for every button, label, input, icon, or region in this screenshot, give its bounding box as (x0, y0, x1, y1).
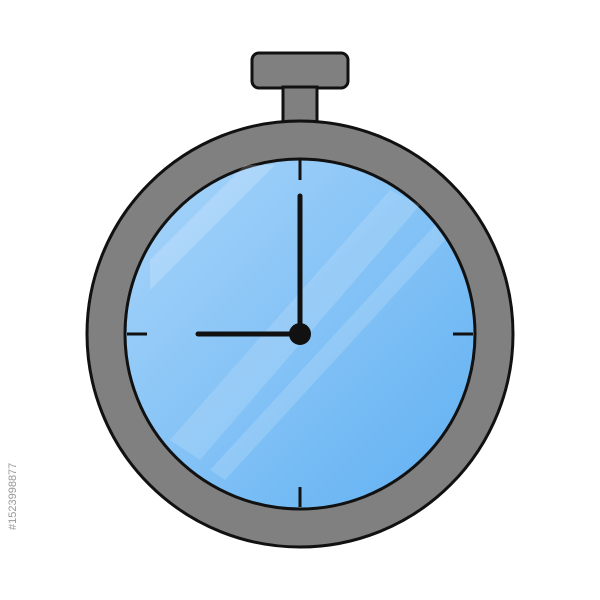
icon: clock face (125, 159, 475, 509)
icon: top button (252, 53, 348, 123)
icon: hour ticks (127, 160, 473, 507)
icon: clock hands (198, 196, 311, 345)
icon: outer case (87, 121, 513, 547)
text: stock id: #1523998877 (7, 463, 19, 530)
